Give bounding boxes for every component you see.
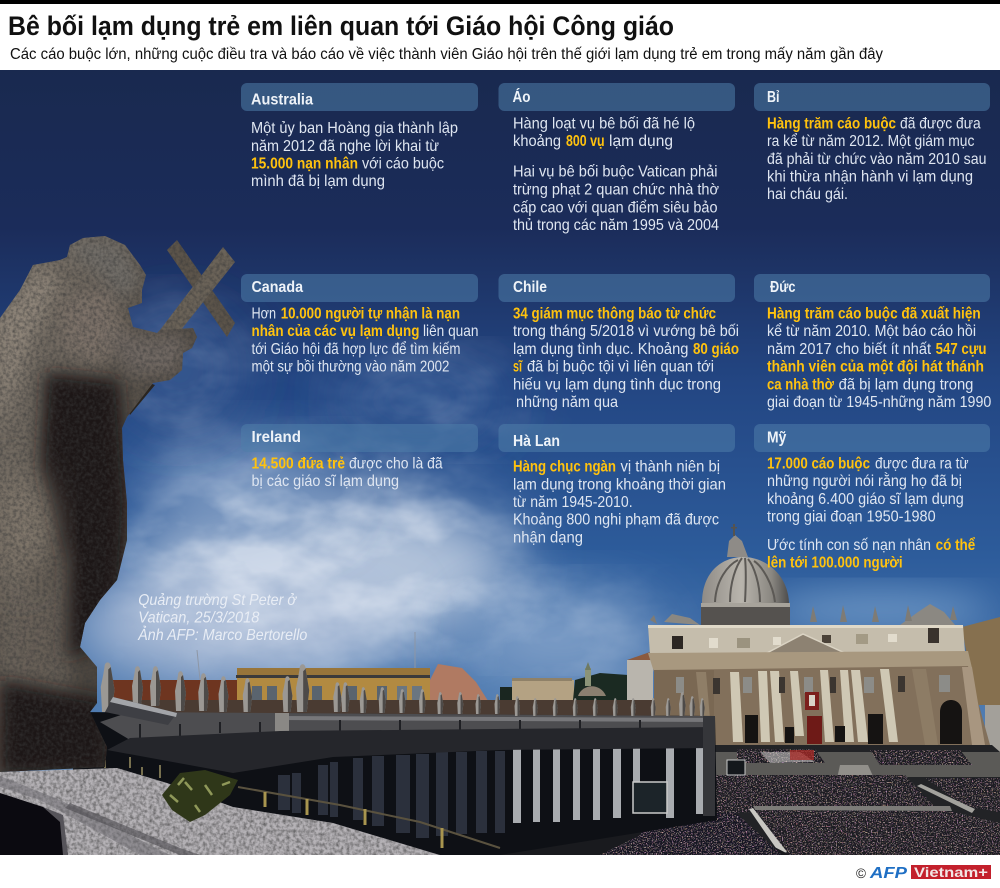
- panel: Canada: một sự bồi thường vào năm 2002: [252, 359, 449, 376]
- panel: Áo: khoảng: [513, 133, 561, 150]
- cross: [130, 240, 235, 415]
- statue with cross: [0, 230, 238, 775]
- panel: Mỹ: trong giai đoạn 1950-1980: [767, 509, 936, 526]
- photo caption: Ảnh AFP: Marco Bertorello: [137, 625, 307, 644]
- entablature: [107, 727, 715, 773]
- panel: Hà Lan: vị thành niên bị: [620, 459, 720, 476]
- panel: Australia: với cáo buộc: [362, 156, 444, 172]
- panel: Hà Lan: từ năm 1945-2010.: [513, 494, 633, 511]
- square and crowds: [500, 745, 1000, 855]
- attic: [648, 625, 965, 655]
- panel: Canada: 10.000 người tự nhận là nạn: [281, 305, 460, 322]
- panel: Mỹ: những người nói rằng họ đã bị: [767, 471, 962, 490]
- photo caption: [137, 592, 307, 644]
- panel: Canada: nhân của các vụ lạm dụng: [252, 323, 419, 340]
- panel: Bỉ: [754, 83, 990, 203]
- panel: Canada: liên quan: [423, 323, 478, 340]
- panel: Ireland: Ireland: [252, 429, 301, 446]
- panel: Áo: lạm dụng: [609, 133, 673, 150]
- panel: Đức: đã bị lạm dụng trong: [839, 376, 973, 394]
- panel: Đức: kể từ năm 2010. Một báo cáo hồi: [767, 322, 976, 340]
- panel: Áo: 800 vụ: [566, 133, 604, 150]
- grey slab beside statue: [105, 697, 177, 725]
- header: Canada: [241, 274, 478, 302]
- subtitle: Các cáo buộc lớn, những cuộc điều tra và báo cáo về việc thành viên Giáo hội trên thế giới lạm dụng trẻ em trong mấy năm gần đây: [10, 46, 883, 63]
- logo: Vietnam+: Vietnam+: [914, 864, 988, 880]
- header: Mỹ: [754, 424, 990, 452]
- doors: [745, 700, 962, 744]
- photo caption: Quảng trường St Peter ở: [138, 592, 297, 609]
- panel: Canada: Hơn: [252, 305, 276, 322]
- panel: Đức: 547 cựu: [936, 341, 986, 358]
- distant buildings and trees: [105, 632, 705, 717]
- railing: [238, 787, 500, 848]
- panel: Australia: mình đã bị lạm dụng: [251, 173, 385, 190]
- colonnade: [70, 712, 745, 855]
- panel: Australia: Một ủy ban Hoàng gia thành lập: [251, 120, 458, 137]
- panel: Chile: những năm qua: [516, 394, 618, 411]
- small screen: [727, 760, 745, 775]
- panel: Australia: Australia: [251, 92, 313, 108]
- panel: Mỹ: 17.000 cáo buộc: [767, 455, 870, 472]
- panel: Chile: trong tháng 5/2018 vì vướng bê bối: [513, 323, 739, 340]
- panel: Ireland: 14.500 đứa trẻ: [252, 455, 345, 472]
- panel: Mỹ: lên tới 100.000 người: [767, 555, 903, 572]
- balustrade statues: [101, 662, 705, 716]
- statue body: [0, 230, 210, 775]
- title: Bê bối lạm dụng trẻ em liên quan tới Giáo hội Công giáo: [8, 11, 674, 41]
- header: Áo: [498, 83, 735, 111]
- footer logos: [856, 864, 991, 882]
- entablature: [648, 651, 972, 672]
- balustrade: [100, 712, 715, 740]
- panel: Canada: [241, 274, 478, 376]
- header: Đức: [754, 274, 990, 302]
- panel: Canada: tới Giáo hội đã hợp lực để tìm kiếm: [252, 340, 460, 358]
- panel: Chile: 80 giáo: [693, 341, 739, 358]
- panel: Mỹ: [754, 424, 990, 572]
- dome: [701, 524, 790, 626]
- columns: [696, 667, 985, 745]
- colonnade columns: [278, 751, 505, 838]
- panel: Bỉ: đã được đưa: [900, 116, 981, 132]
- right annex: [962, 617, 1000, 705]
- panel: Hà Lan: lạm dụng trong khoảng thời gian: [513, 476, 726, 493]
- panel: Chile: [498, 274, 739, 411]
- clouds: [70, 310, 990, 685]
- basilica: [648, 524, 1000, 755]
- panel: Chile: 34 giám mục thông báo từ chức: [513, 305, 716, 322]
- panel: Đức: năm 2017 cho biết ít nhất: [767, 341, 931, 358]
- flowers on parapet: [162, 770, 238, 822]
- panel: Áo: Hai vụ bê bối buộc Vatican phải: [513, 164, 718, 181]
- panel: Australia: năm 2012 đã nghe lời khai từ: [251, 138, 439, 155]
- panel: Mỹ: khoảng 6.400 giáo sĩ lạm dụng: [767, 491, 964, 508]
- panel: Mỹ: Ước tính con số nạn nhân: [767, 537, 931, 554]
- panel: Bỉ: khi thừa nhận hành vi lạm dụng: [767, 168, 973, 186]
- header: Ireland: [241, 424, 478, 452]
- panel: Mỹ: có thể: [936, 536, 975, 554]
- panel: Chile: sĩ: [513, 359, 523, 376]
- lower facade: [654, 666, 992, 752]
- panel: Hà Lan: Khoảng 800 nghi phạm đã được: [513, 512, 719, 529]
- panel: Australia: [241, 83, 478, 190]
- panel: Hà Lan: nhận dạng: [513, 529, 583, 546]
- panel: Chile: lạm dụng tình dục. Khoảng: [513, 341, 688, 358]
- panel: Đức: Đức: [770, 279, 796, 296]
- panel: Hà Lan: [498, 424, 735, 546]
- header: Australia: [241, 83, 478, 111]
- header: Chile: [498, 274, 735, 302]
- header: Bỉ: [754, 83, 990, 111]
- panel: Australia: 15.000 nạn nhân: [251, 156, 358, 172]
- panel: Mỹ: được đưa ra từ: [875, 455, 969, 472]
- panel: Đức: ca nhà thờ: [767, 376, 835, 394]
- pediment: [765, 634, 847, 654]
- panel: Áo: cấp cao với quan điểm siêu bảo: [513, 198, 718, 216]
- stone parapet: [0, 757, 500, 855]
- panel: Hà Lan: Hàng chục ngàn: [513, 459, 616, 476]
- photo caption: Vatican, 25/3/2018: [138, 609, 259, 626]
- logo: AFP: AFP: [869, 865, 908, 882]
- panel: Ireland: [241, 424, 478, 490]
- header: Hà Lan: [498, 424, 735, 452]
- panel: Chile: Chile: [513, 279, 547, 296]
- panel: Hà Lan: Hà Lan: [513, 433, 560, 450]
- panel: Bỉ: Hàng trăm cáo buộc: [767, 116, 896, 132]
- panel: Canada: Canada: [252, 279, 303, 296]
- copyright symbol: ©: [856, 866, 866, 881]
- facade windows: [676, 675, 950, 694]
- panel: Áo: trừng phạt 2 quan chức nhà thờ: [513, 181, 719, 198]
- panel: Áo: [498, 83, 735, 234]
- panel: Chile: hiếu vụ lạm dụng tình dục trong: [513, 376, 721, 394]
- panel: Ireland: được cho là đã: [349, 455, 443, 472]
- panel: Bỉ: hai cháu gái.: [767, 186, 848, 203]
- panel: Áo: thủ trong các năm 1995 và 2004: [513, 217, 719, 234]
- panel: Chile: đã bị buộc tội vì liên quan tới: [527, 359, 714, 376]
- panel: Áo: Áo: [512, 87, 531, 106]
- papal banner: [805, 692, 819, 710]
- panel: Bỉ: Bỉ: [767, 89, 780, 106]
- panel: Đức: [754, 274, 991, 411]
- panel: Mỹ: Mỹ: [767, 430, 786, 447]
- panel: Áo: Hàng loạt vụ bê bối đã hé lộ: [513, 116, 695, 132]
- top black bar: [0, 0, 1000, 4]
- panel: Bỉ: ra kể từ năm 2012. Một giám mục: [767, 132, 974, 150]
- large broadcast screen: [633, 782, 667, 813]
- panel: Ireland: bị các giáo sĩ lạm dụng: [252, 473, 399, 490]
